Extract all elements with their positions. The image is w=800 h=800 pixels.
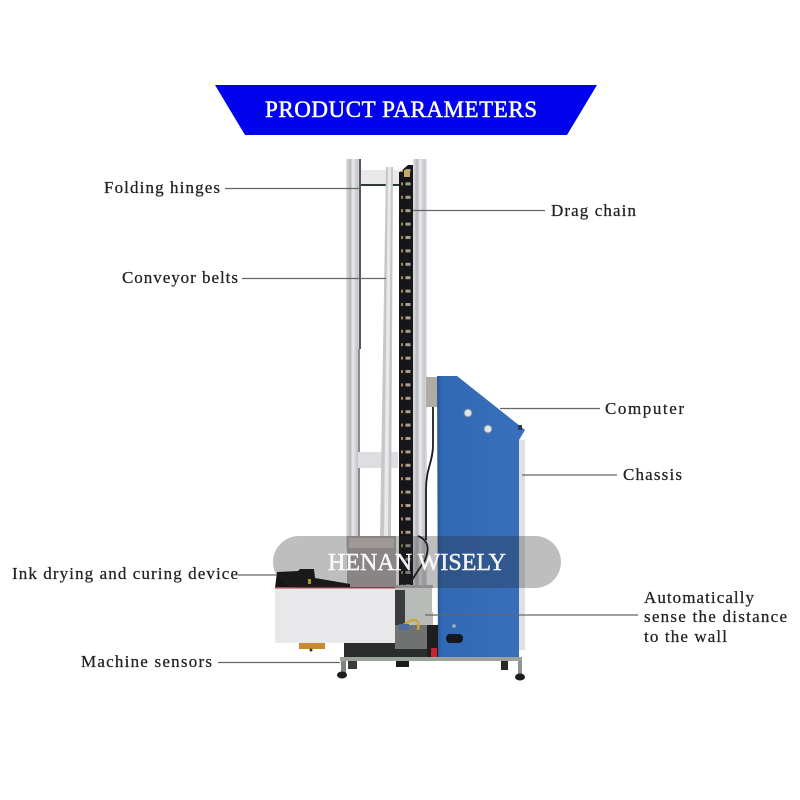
label: automatically sense the distance: [425, 588, 787, 646]
watermark pill: HENAN WISELY: [328, 550, 506, 576]
control box: [395, 585, 438, 657]
left vertical rail: [346, 159, 361, 549]
upper crossbar hinge: [361, 170, 400, 186]
label: chassis: Chassis: [623, 465, 682, 484]
right caster: [518, 661, 522, 675]
conveyor belt column: [380, 167, 393, 536]
button upper: [464, 409, 472, 417]
label: conveyor belts: Conveyor belts: [122, 268, 238, 287]
curing lamp housing: [347, 536, 396, 588]
label: machine sensors: Machine sensors: [81, 652, 212, 671]
orange sensors: [299, 643, 325, 652]
white print box: [275, 587, 395, 643]
mounting plate and cable: [412, 377, 438, 580]
frame base: [337, 643, 525, 680]
title banner: PRODUCT PARAMETERS: [265, 97, 537, 122]
label: computer: Computer: [605, 399, 684, 418]
label: ink drying and curing device: Ink drying and curing device: [12, 564, 238, 583]
label: automatically sense the distance: sense the distance: [644, 607, 787, 626]
label: automatically sense the distance: to the wall: [644, 627, 727, 646]
drag chain: [399, 165, 413, 588]
title banner: [215, 85, 597, 135]
label: drag chain: Drag chain: [551, 201, 636, 220]
machine illustration: [275, 159, 525, 680]
lower crossbar: [358, 452, 398, 468]
blue cabinet: [437, 376, 525, 657]
left caster: [341, 661, 346, 673]
watermark pill: [273, 536, 561, 588]
right vertical rail: [413, 159, 427, 589]
black ink dryer: [275, 569, 350, 588]
label: folding hinges: Folding hinges: [104, 178, 220, 197]
button lower: [484, 425, 492, 433]
power socket: [446, 634, 463, 643]
label: automatically sense the distance: Automatically: [644, 588, 754, 607]
